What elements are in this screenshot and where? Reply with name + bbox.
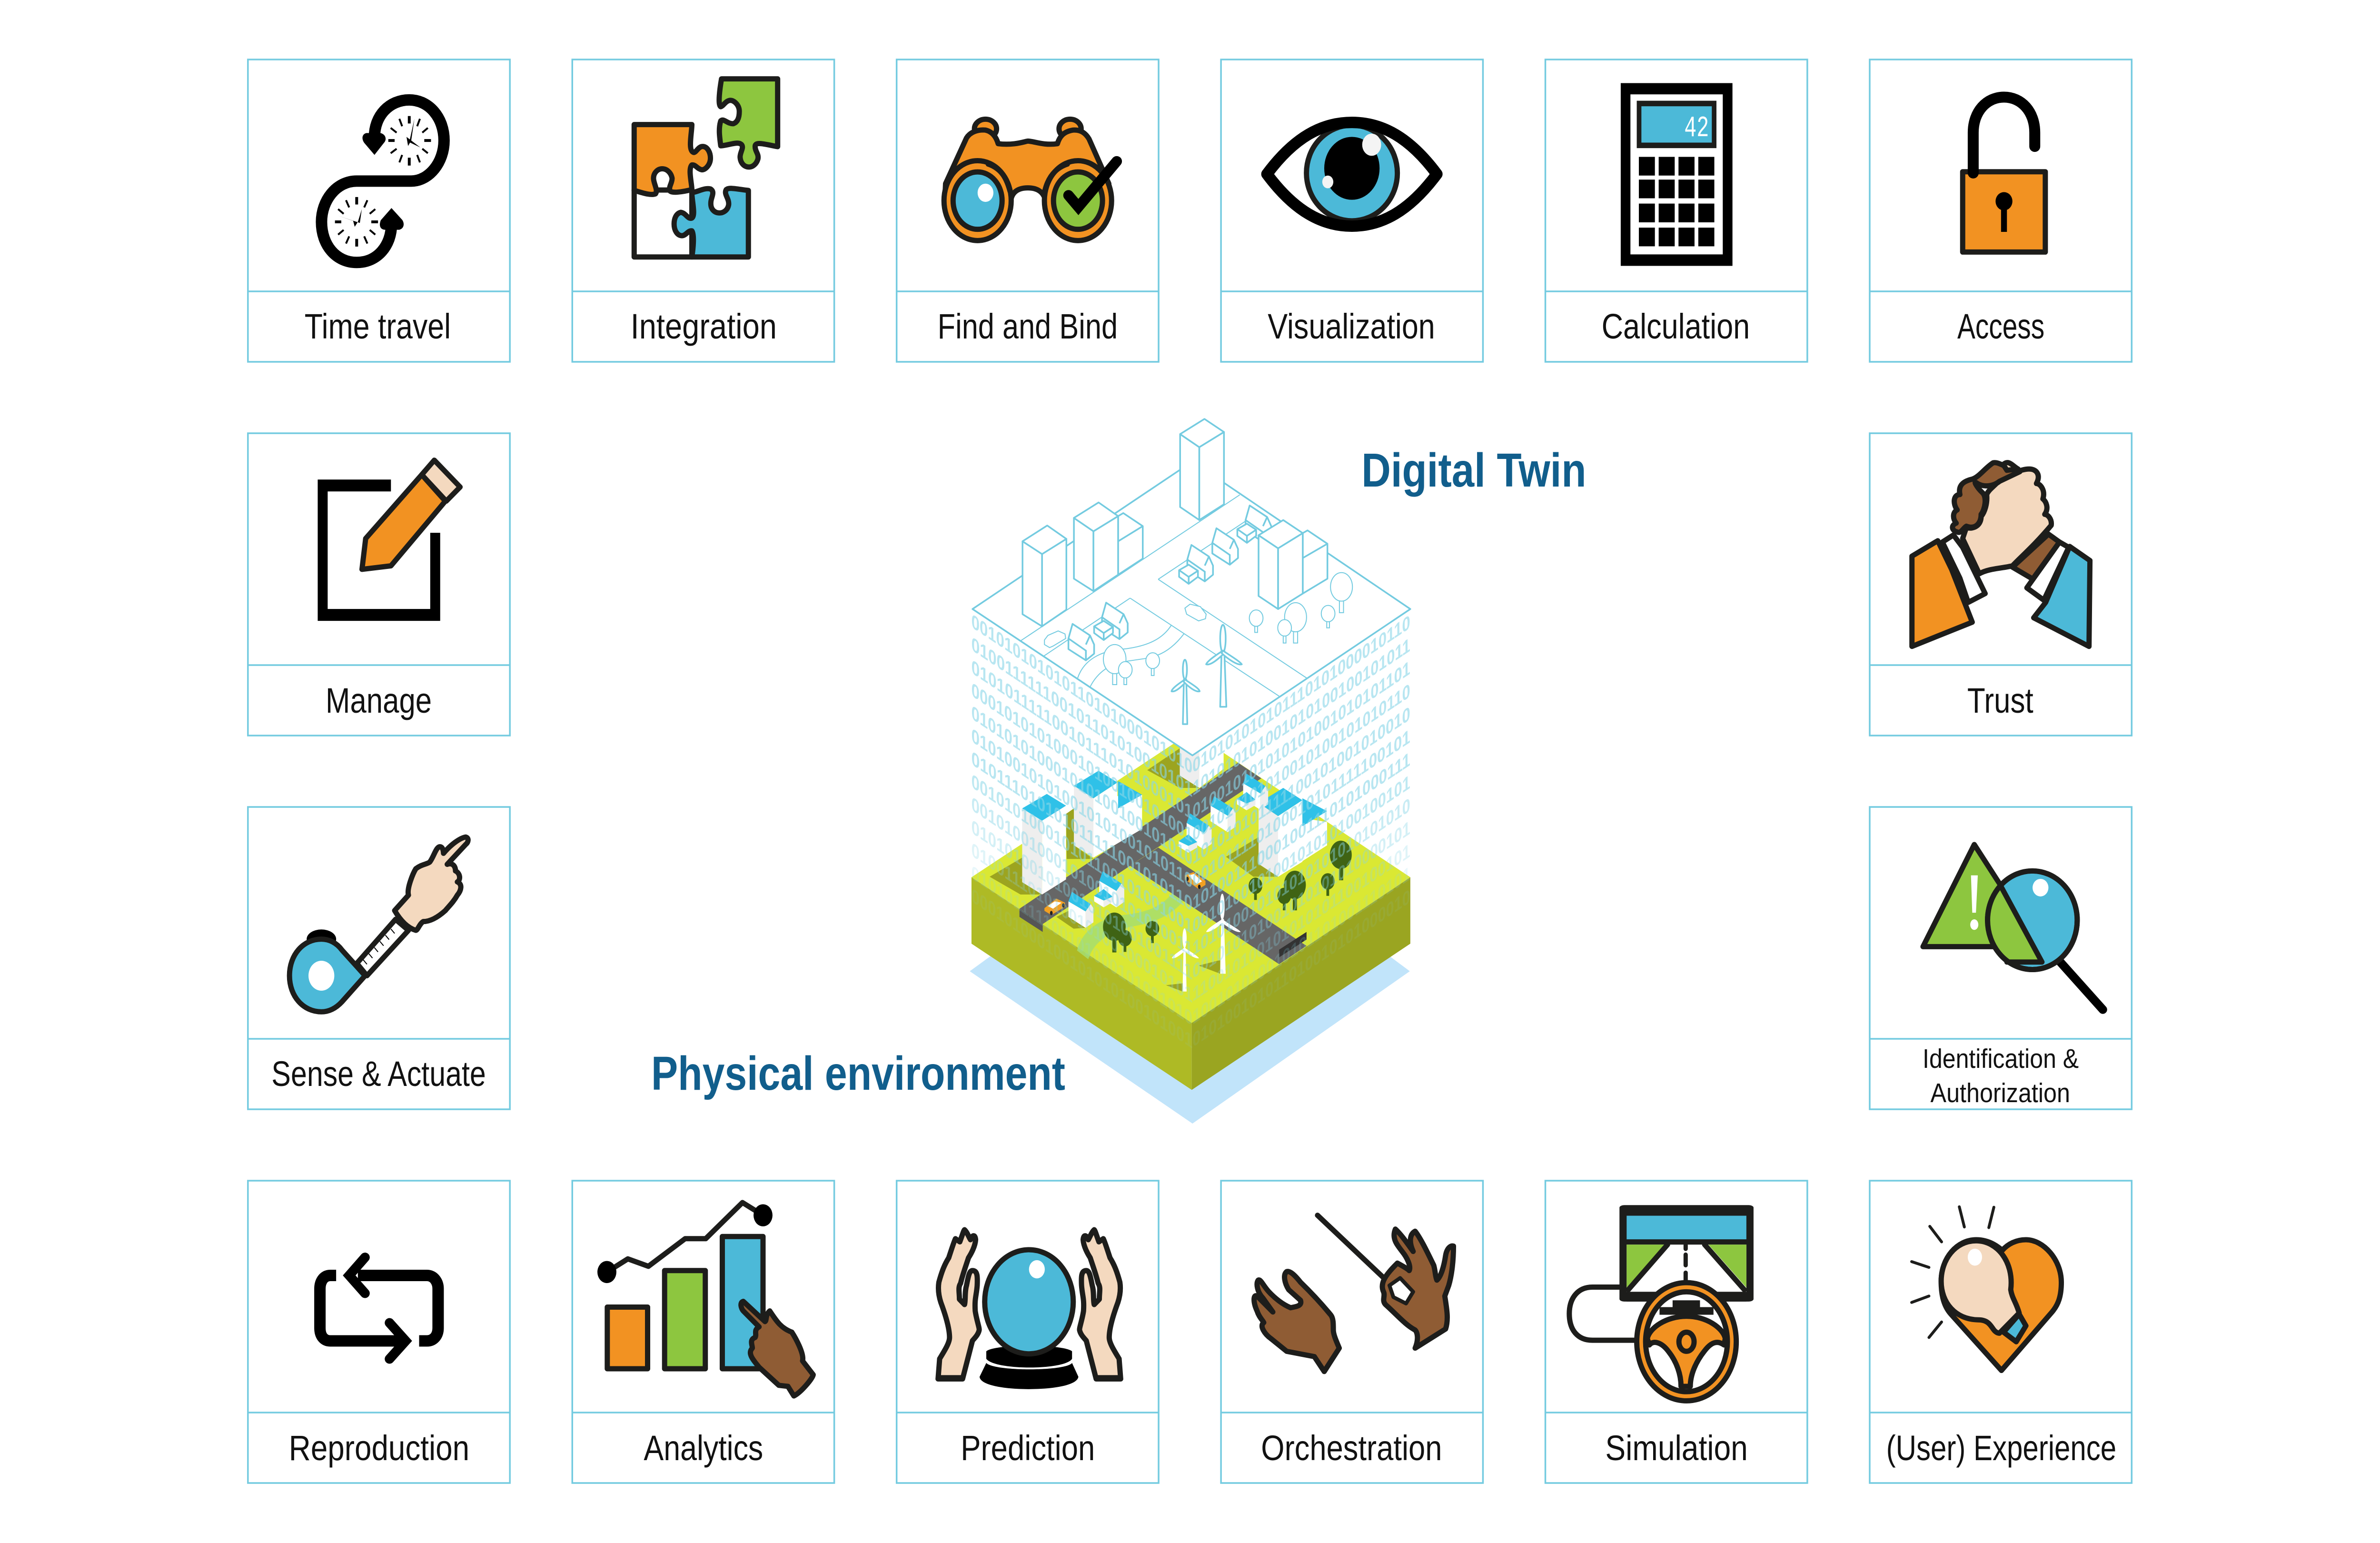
physical environment block xyxy=(972,732,1410,1090)
label: Integration: Integration xyxy=(631,307,777,346)
binary data left wall: 001010100010101100101001001 xyxy=(972,769,1192,939)
icon: driving simulator xyxy=(1569,1205,1754,1401)
heading: Physical environment: Physical environment xyxy=(651,1046,1065,1100)
water base under physical block xyxy=(970,809,1410,1124)
binary data right wall: 100101010010101101001110101 xyxy=(1192,862,1410,1029)
binary data left wall: 010100101010010101001010110 xyxy=(972,724,1192,893)
panel: (User) Experience xyxy=(1870,1181,2132,1483)
binary data right wall: 010101010101110101000010110 xyxy=(1192,610,1410,777)
label: Prediction: Prediction xyxy=(961,1428,1095,1468)
icon: repeat arrows xyxy=(320,1257,438,1359)
icon: open padlock xyxy=(1963,97,2045,252)
label: Manage: Manage xyxy=(326,681,432,720)
panel: Identification & Authorization xyxy=(1870,807,2132,1109)
binary data left wall: 010111010101011111001010110 xyxy=(972,747,1192,916)
panel: Access xyxy=(1870,60,2132,362)
binary data right wall: 110010100101010101100100101 xyxy=(1192,839,1410,1006)
label: Calculation: Calculation xyxy=(1602,307,1750,346)
binary data left wall xyxy=(972,609,1192,1053)
binary data left wall: 010011111100101101010010101 xyxy=(972,632,1192,802)
binary data left wall: 010101111100101000101001010 xyxy=(972,861,1192,1030)
label: Identification & Authorization: Identification & xyxy=(1923,1044,2079,1074)
label: (User) Experience: (User) Experience xyxy=(1886,1428,2116,1468)
binary data left wall: 010101010001010100100101010 xyxy=(972,701,1192,870)
panel: Trust xyxy=(1870,433,2132,736)
binary data left wall: 001010010001010010101010011 xyxy=(972,792,1192,962)
label: Trust: Trust xyxy=(1967,681,2033,720)
panel: Find and Bind xyxy=(897,60,1159,362)
icon: clocks on looping arrow xyxy=(321,100,444,262)
panel: Orchestration xyxy=(1221,1181,1483,1483)
panel: Visualization xyxy=(1221,60,1483,362)
icon: measuring tape with hand xyxy=(289,837,468,1012)
label: Access: Access xyxy=(1957,307,2044,346)
label: Sense & Actuate: Sense & Actuate xyxy=(271,1054,486,1094)
icon: calculator: 42 xyxy=(1684,112,1709,145)
heading: Digital Twin: Digital Twin xyxy=(1361,443,1586,497)
binary data left wall: 000101000100101010100101001 xyxy=(972,884,1192,1053)
digital twin wireframe city xyxy=(972,419,1410,756)
binary data right wall: 001010101001010101010000101 xyxy=(1192,816,1410,983)
binary data left wall: 000101010100010100100101001 xyxy=(972,678,1192,847)
panel: Integration xyxy=(572,60,834,362)
central illustration: digital twin over physical environment xyxy=(970,419,1410,1124)
label: Orchestration: Orchestration xyxy=(1261,1428,1442,1468)
label: Reproduction: Reproduction xyxy=(289,1428,469,1468)
binary data left wall: 010101001010010101001001111 xyxy=(972,815,1192,985)
icon: warning triangle under magnifier xyxy=(1923,845,2103,1010)
binary data right wall xyxy=(1192,610,1410,1052)
icon: handshake xyxy=(1912,463,2090,647)
panel: Simulation xyxy=(1546,1181,1807,1483)
panel: Reproduction xyxy=(248,1181,510,1483)
icon: pencil and frame xyxy=(317,460,460,621)
panel: Analytics xyxy=(572,1181,834,1483)
panel: Manage xyxy=(248,433,510,736)
binary data right wall: 101001110001001110101000111 xyxy=(1192,747,1410,915)
icon: crystal ball and hands xyxy=(937,1230,1121,1389)
binary data left wall: 001010101010110101000101010 xyxy=(972,609,1192,779)
panel: Calculation xyxy=(1546,60,1807,362)
binary data right wall: 101010010101010101010101010 xyxy=(1192,793,1410,960)
binary data right wall: 101010101001010100100101011 xyxy=(1192,633,1410,800)
binary data right wall: 001010010100101010100100101 xyxy=(1192,770,1410,937)
binary data left wall: 010101111100101110101000101 xyxy=(972,655,1192,825)
icon: eye xyxy=(1267,122,1437,226)
panel: Sense & Actuate xyxy=(248,807,510,1109)
icon: binoculars with check mark xyxy=(944,119,1117,240)
label: Time travel: Time travel xyxy=(305,307,451,346)
icon: conductor hands with baton xyxy=(1254,1215,1454,1372)
label: Identification & Authorization xyxy=(1923,1044,2079,1108)
label: Visualization: Visualization xyxy=(1268,307,1435,346)
binary data left wall: 010011101010010100100010101 xyxy=(972,838,1192,1007)
label: Analytics: Analytics xyxy=(644,1428,763,1468)
binary data right wall: 010100101011010010101000010 xyxy=(1192,885,1410,1052)
binary data right wall: 001010101010010100101010110 xyxy=(1192,679,1410,846)
panel: Prediction xyxy=(897,1181,1159,1483)
binary data right wall: 010010101010101001010101101 xyxy=(1192,656,1410,823)
binary data right wall: 001011110100010101111100101 xyxy=(1192,725,1410,892)
binary data right wall: 101010101111100101001010010 xyxy=(1192,702,1410,869)
label: Identification & Authorization: Authorization xyxy=(1931,1078,2070,1108)
panel: Time travel xyxy=(248,60,510,362)
label: Simulation: Simulation xyxy=(1605,1428,1748,1468)
icon: puzzle pieces xyxy=(634,79,778,257)
label: Find and Bind: Find and Bind xyxy=(938,307,1118,346)
icon: calculator xyxy=(1621,83,1733,266)
icon: light bulb and heart xyxy=(1912,1207,2062,1371)
icon: bar chart with line and pointing hand xyxy=(597,1203,813,1396)
